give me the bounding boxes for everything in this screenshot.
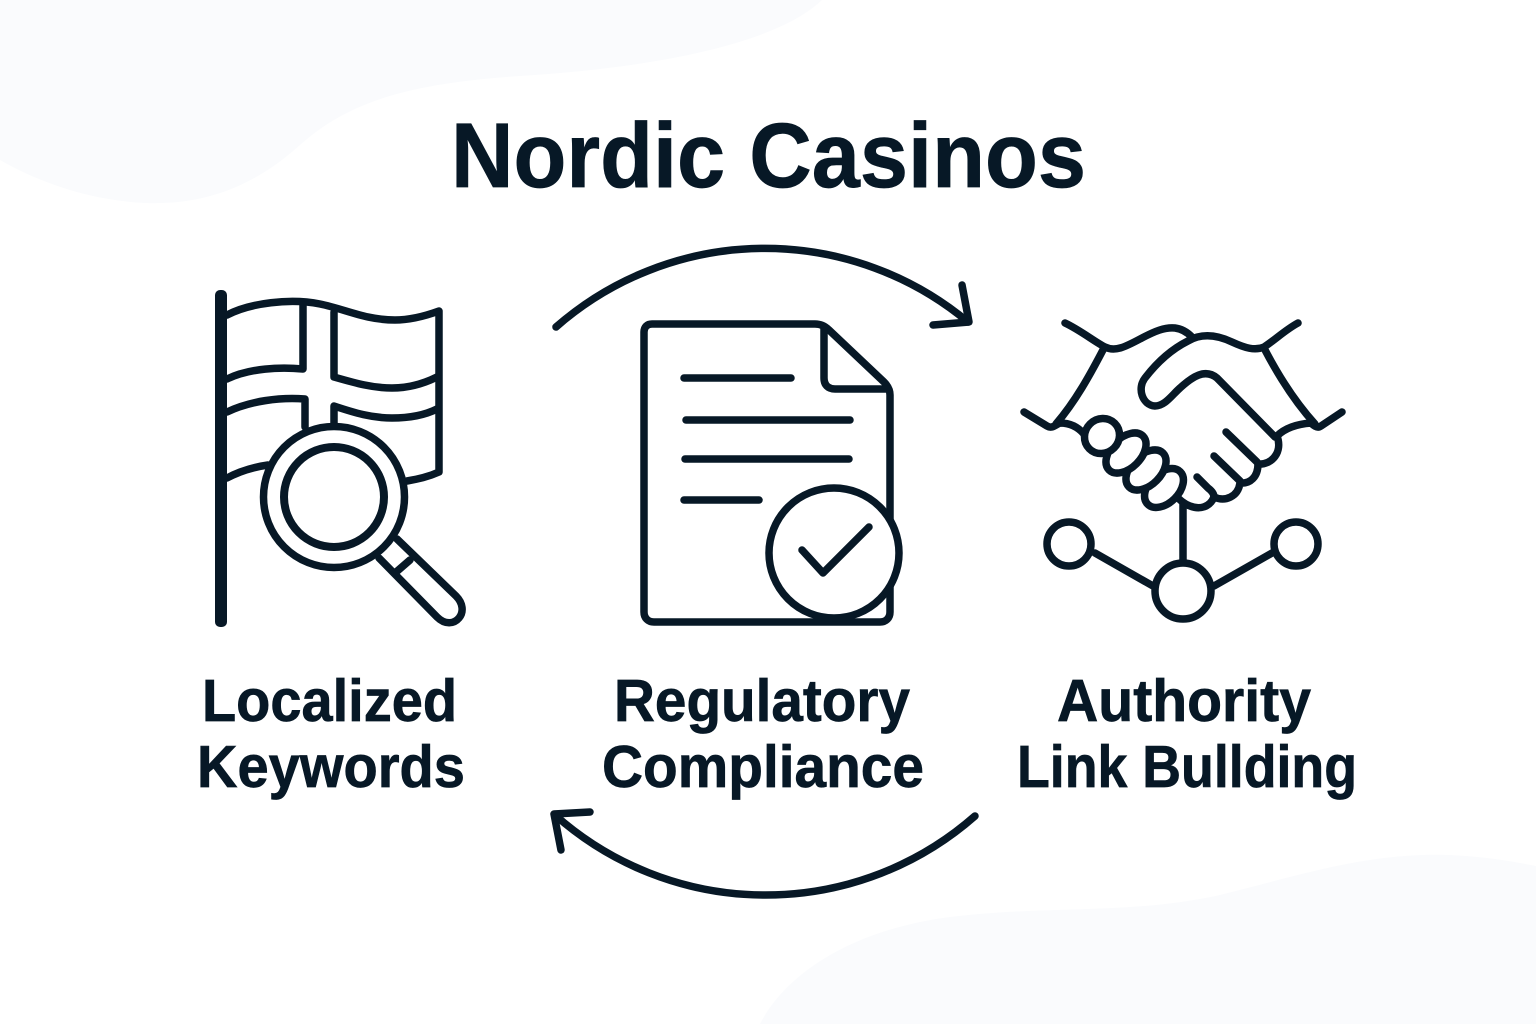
label: Regulatory Compliance: Regulatory: [614, 668, 910, 734]
label: Localized Keywords: [197, 668, 465, 800]
magnifying glass lens: [264, 426, 404, 568]
label: Authority Link Bullding: Link Bullding: [1017, 734, 1357, 800]
handshake: [1024, 323, 1342, 515]
label: Regulatory Compliance: Compliance: [602, 734, 924, 800]
arrow: top curved arrow: [556, 248, 969, 327]
label: Localized Keywords: Keywords: [197, 734, 465, 800]
flag pole: [215, 290, 227, 627]
flag outline: [227, 301, 439, 481]
document page: [644, 324, 890, 622]
link network: [1047, 504, 1318, 619]
label: Authority Link Bullding: [1017, 668, 1357, 800]
magnifying glass handle: [379, 539, 462, 623]
document text lines: [684, 378, 850, 500]
arrow: bottom curved arrow: [554, 812, 975, 895]
icon: flag with magnifying glass: [215, 290, 462, 627]
label: Authority Link Bullding: Authority: [1057, 668, 1311, 734]
check badge: [769, 488, 899, 618]
label: Localized Keywords: Localized: [202, 668, 457, 734]
label: Regulatory Compliance: [602, 668, 924, 800]
icon: handshake with link network: [1024, 323, 1342, 619]
icon: document with check mark: [644, 324, 899, 622]
title: Nordic Casinos: [451, 105, 1086, 207]
page fold: [824, 328, 888, 389]
